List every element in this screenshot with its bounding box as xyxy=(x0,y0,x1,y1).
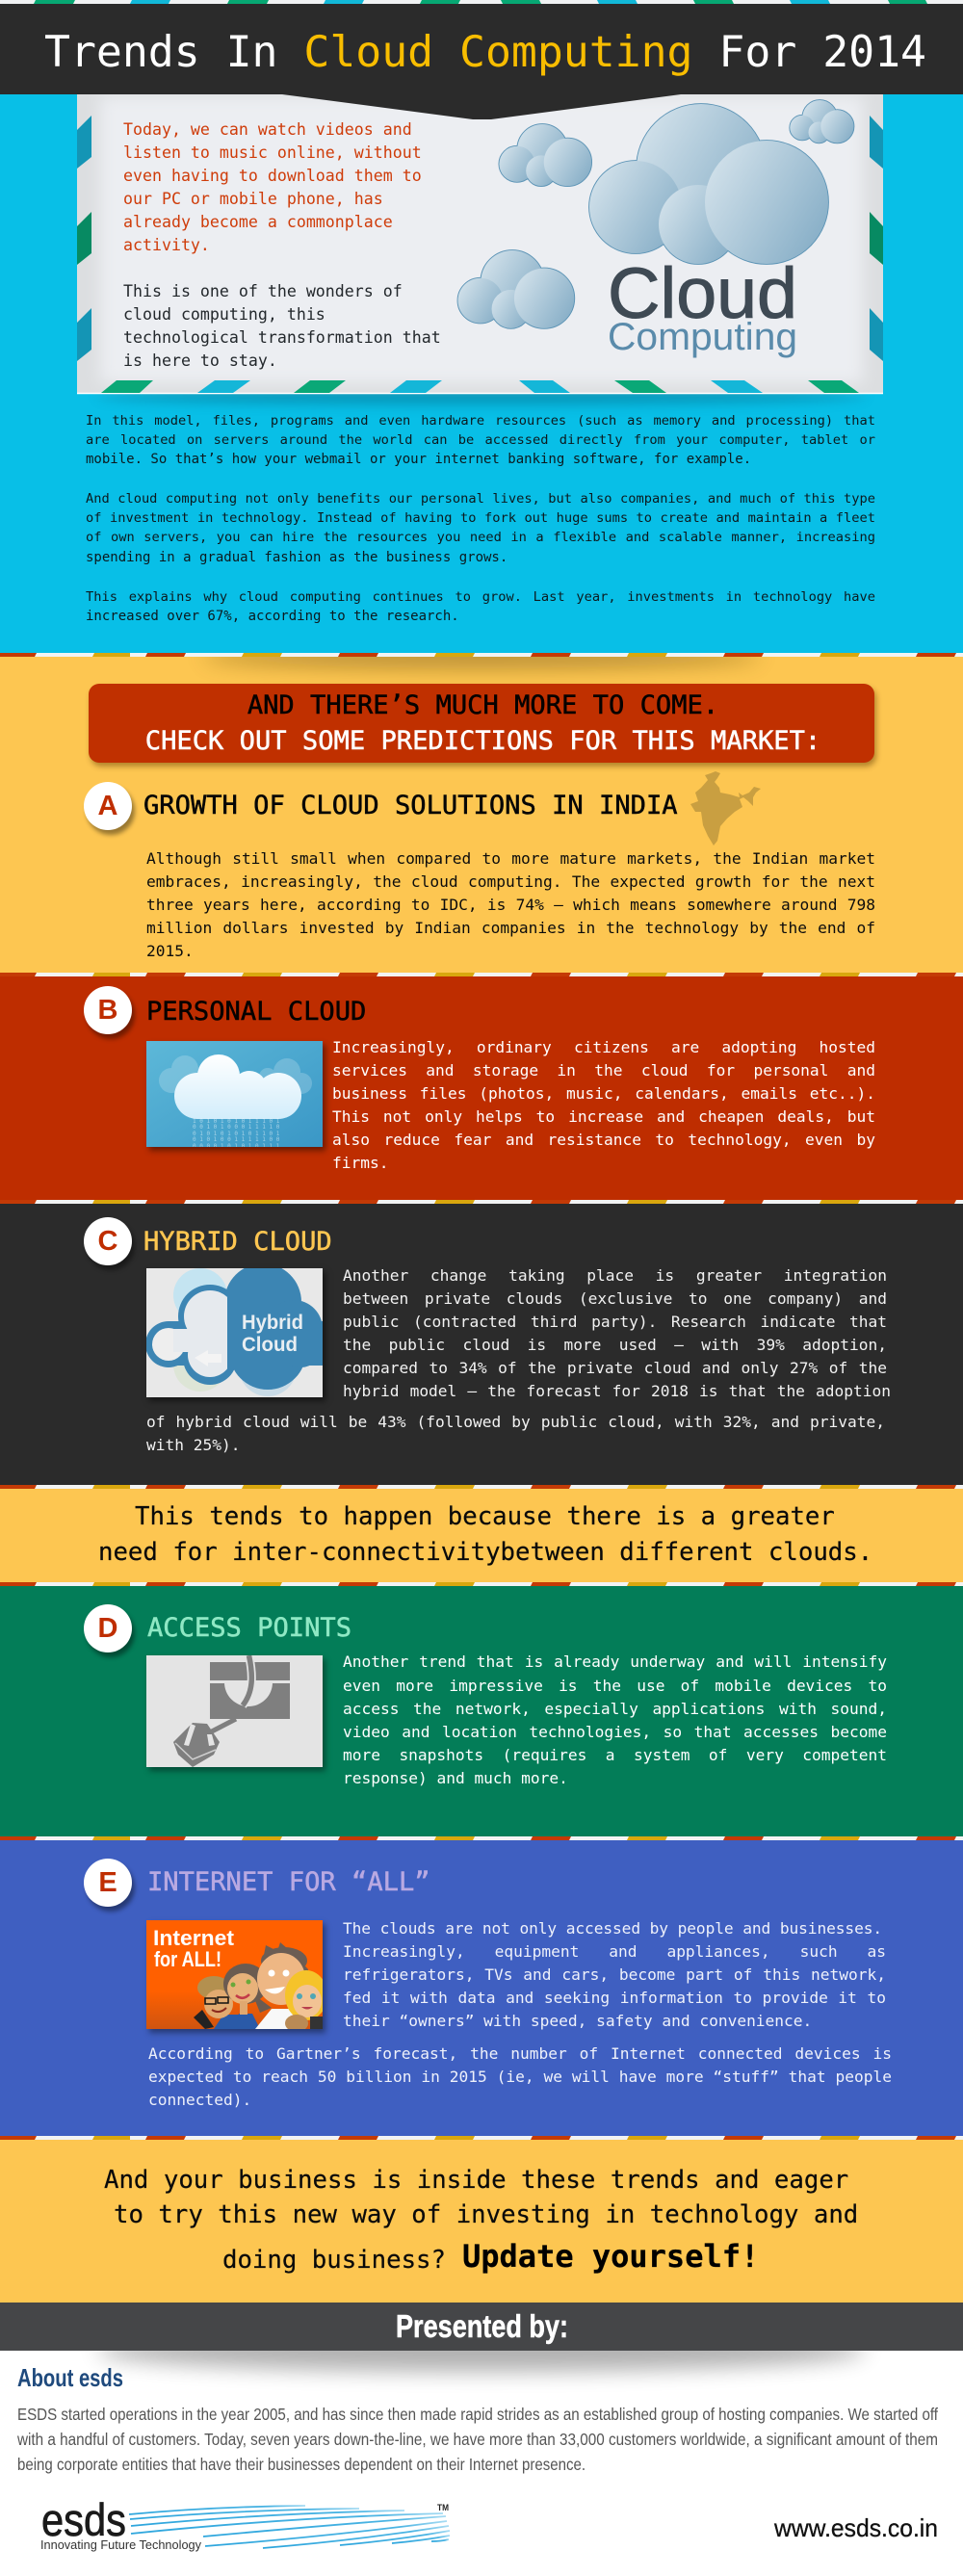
icon: large cloud xyxy=(589,104,828,264)
callout line one: This tends to happen because there is a greater xyxy=(135,1502,835,1531)
text: personal cloud: This not only helps to increase and cheapen deals, but xyxy=(332,1107,875,1126)
about paragraph: being corporate entities that have their businesses dependent on their Internet presence. xyxy=(17,2455,586,2474)
text: Gartner forecast: expected to reach 50 billion in 2015 (ie, we will have more “stuff” that people xyxy=(148,2068,892,2086)
text: India growth: embraces, increasingly, the cloud computing. The expected growth for the next xyxy=(146,872,875,891)
text: personal cloud: also reduce fear and resistance to technology, even by xyxy=(332,1131,875,1149)
website url: www.esds.co.in xyxy=(773,2513,938,2542)
panel: interconnectivity callout xyxy=(0,1489,963,1582)
callout banner xyxy=(89,684,874,763)
icon: letter E badge xyxy=(84,1859,132,1907)
text: India growth: Although still small when compared to more mature markets, the Indian market xyxy=(146,849,875,868)
icon: small cloud lower xyxy=(457,250,574,328)
intro paragraph two: And cloud computing not only benefits our personal lives, but also companies, and much of this type xyxy=(86,491,875,507)
icon: letter B badge xyxy=(84,986,132,1034)
image: personal cloud illustration xyxy=(146,1041,323,1147)
text: access points: Another trend that is already underway and will intensify xyxy=(343,1652,887,1671)
text: access points: response) and much more. xyxy=(343,1769,568,1787)
text: internet for all beside image: fed it with data and seeking information to provide it to xyxy=(343,1989,886,2007)
panel: E internet for all xyxy=(0,1840,963,2136)
image: internet for all cartoon: Internet xyxy=(153,1926,235,1950)
letter text: lead paragraph: already become a commonplace xyxy=(123,213,393,231)
text: personal cloud: business files (photos, music, calendars, emails etc..). xyxy=(332,1084,875,1103)
letter text: lead paragraph: activity. xyxy=(123,236,210,254)
text: internet for all beside image: The clouds are not only accessed by people and businesses. xyxy=(343,1919,882,1938)
text: access points: even more impressive is the use of mobile devices to xyxy=(343,1677,887,1695)
text: hybrid cloud below image: with 25%). xyxy=(146,1436,240,1454)
image: personal cloud illustration: 0 1 0 1 0 1 0 1 0 1 1 0 1 xyxy=(193,1131,280,1137)
closing line one: And your business is inside these trends and eager xyxy=(104,2166,848,2195)
text: Gartner forecast: connected). xyxy=(148,2091,251,2109)
image: internet for all cartoon xyxy=(146,1920,323,2029)
text: internet for all beside image: their “owners” with speed, safety and convenience. xyxy=(343,2012,812,2030)
intro paragraph two xyxy=(86,491,875,565)
image: personal cloud illustration: 0 0 1 0 1 0 0 0 1 1 1 1 0 xyxy=(193,1124,280,1131)
icon: letter D badge xyxy=(84,1604,132,1652)
icon: letter D badge: D xyxy=(98,1613,117,1644)
cloud computing logotype: Cloud xyxy=(608,253,797,333)
esds logo: esds xyxy=(41,2494,126,2545)
text: hybrid cloud beside image: between private clouds (exclusive to one company) and xyxy=(343,1289,887,1308)
text: access points: access the network, especially applications with sound, xyxy=(343,1700,887,1718)
image: plug illustration xyxy=(146,1655,323,1767)
icon: small cloud top right xyxy=(790,100,853,143)
text: internet for all beside image: refrigerators, TVs and cars, become part of this network, xyxy=(343,1965,886,1984)
icon: India map xyxy=(690,771,761,846)
image: personal cloud illustration: 0 1 0 1 0 0 1 1 1 1 1 0 0 xyxy=(193,1136,280,1143)
icon: letter A badge: A xyxy=(98,791,117,821)
panel: presented by bar xyxy=(0,2303,963,2351)
image: hybrid cloud illustration xyxy=(146,1268,323,1397)
icon: letter C badge xyxy=(84,1217,132,1265)
text: India growth: three years here, according to IDC, is 74% – which means somewhere around 798 xyxy=(146,896,875,914)
letter text: lead paragraph: listen to music online, without xyxy=(123,143,422,162)
text: access points: video and location technologies, so that accesses become xyxy=(343,1723,887,1741)
letter text: lead paragraph: even having to download them to xyxy=(123,167,422,185)
text: hybrid cloud beside image: the public cloud is more used – with 39% adoption, xyxy=(343,1336,887,1354)
letter text: second paragraph: cloud computing, this xyxy=(123,305,325,324)
about heading: About esds xyxy=(17,2363,123,2392)
intro paragraph one xyxy=(86,412,875,467)
letter text: second paragraph: technological transformation that xyxy=(123,328,441,347)
image: personal cloud illustration: 1 0 1 0 1 0 1 0 1 1 1 0 1 xyxy=(193,1118,280,1125)
text: personal cloud: services and storage in the cloud for personal and xyxy=(332,1061,875,1080)
closing line two: to try this new way of investing in technology and xyxy=(114,2200,858,2229)
text: Gartner forecast: According to Gartner’s forecast, the number of Internet connected devices is xyxy=(148,2044,892,2063)
text: hybrid cloud beside image: compared to 34% of the private cloud and only 27% of the xyxy=(343,1359,887,1377)
panel: about esds footer xyxy=(16,2351,938,2552)
letter text: lead paragraph: our PC or mobile phone, has xyxy=(123,190,383,208)
text: hybrid cloud beside image: public (contracted third party). Research indicate that xyxy=(343,1313,887,1331)
callout line two: need for inter-connectivitybetween different clouds. xyxy=(98,1538,872,1567)
panel: B personal cloud xyxy=(0,976,963,1200)
callout banner: CHECK OUT SOME PREDICTIONS FOR THIS MARKET: xyxy=(145,726,820,756)
heading D: ACCESS POINTS xyxy=(147,1613,351,1643)
text: India growth: million dollars invested by Indian companies in the technology by the end of xyxy=(146,919,875,937)
intro paragraph three: This explains why cloud computing continues to grow. Last year, investments in technology have xyxy=(86,589,875,605)
title banner xyxy=(0,0,963,119)
letter text: lead paragraph: Today, we can watch videos and xyxy=(123,120,412,139)
heading B: PERSONAL CLOUD xyxy=(146,997,366,1027)
image: internet for all cartoon: for ALL! xyxy=(154,1947,221,1971)
esds logo: TM xyxy=(437,2503,449,2512)
panel: C hybrid cloud xyxy=(0,1204,963,1485)
panel: presented by bar: Presented by: xyxy=(396,2308,568,2344)
text: personal cloud: firms. xyxy=(332,1154,388,1172)
cloud computing logotype: Computing xyxy=(608,316,797,358)
title banner: Trends In Cloud Computing For 2014 xyxy=(44,26,926,77)
update yourself emphasis: Update yourself! xyxy=(462,2238,759,2275)
esds logo xyxy=(40,2494,450,2552)
intro paragraph three xyxy=(86,589,875,624)
heading C: HYBRID CLOUD xyxy=(143,1227,332,1257)
icon: letter E badge: E xyxy=(98,1867,117,1898)
text: personal cloud xyxy=(332,1038,875,1172)
image: hybrid cloud illustration: Hybrid xyxy=(242,1312,303,1334)
text: India growth xyxy=(146,849,875,960)
letter text: second paragraph: This is one of the wonders of xyxy=(123,282,403,300)
panel: introduction xyxy=(0,94,963,653)
panel: D access points xyxy=(0,1586,963,1836)
intro paragraph three: increased over 67%, according to the research. xyxy=(86,609,459,624)
text: hybrid cloud below image xyxy=(146,1413,885,1454)
heading A: GROWTH OF CLOUD SOLUTIONS IN INDIA xyxy=(143,791,678,820)
intro paragraph one: are located on servers around the world can be accessed directly from your computer, tablet or xyxy=(86,432,875,448)
text: India growth: 2015. xyxy=(146,942,194,960)
panel: closing call to action xyxy=(0,2140,963,2303)
envelope letter with clouds xyxy=(77,94,883,410)
letter text: lead paragraph xyxy=(123,120,422,254)
text: access points xyxy=(343,1652,887,1787)
intro paragraph two: of investment in technology. Instead of having to fork out huge sums to create and maintain a fleet xyxy=(86,510,875,526)
icon: letter B badge: B xyxy=(98,995,117,1026)
image: hybrid cloud illustration: Cloud xyxy=(242,1334,298,1356)
text: hybrid cloud beside image: Another change taking place is greater integration xyxy=(343,1266,887,1285)
icon: letter C badge: C xyxy=(98,1226,117,1257)
intro paragraph two: spending in a gradual fashion as the business grows. xyxy=(86,550,508,565)
text: hybrid cloud beside image: hybrid model – the forecast for 2018 is that the adoption xyxy=(343,1382,891,1400)
closing line three: doing business? xyxy=(222,2246,446,2275)
about paragraph xyxy=(16,2405,938,2474)
letter text: second paragraph: is here to stay. xyxy=(123,351,277,370)
icon: letter A badge xyxy=(84,782,132,830)
letter text: second paragraph xyxy=(123,282,441,370)
text: personal cloud: Increasingly, ordinary citizens are adopting hosted xyxy=(332,1038,875,1056)
text: internet for all beside image: Increasingly, equipment and appliances, such as xyxy=(343,1942,886,1961)
intro paragraph one: In this model, files, programs and even hardware resources (such as memory and processing) that xyxy=(86,412,875,428)
icon: small cloud middle xyxy=(499,124,591,186)
esds logo: Innovating Future Technology xyxy=(40,2537,201,2552)
heading E: INTERNET FOR “ALL” xyxy=(147,1867,430,1897)
panel: A growth of cloud solutions in India xyxy=(0,657,963,973)
callout banner: AND THERE’S MUCH MORE TO COME. xyxy=(247,690,718,720)
text: access points: more snapshots (requires a system of very competent xyxy=(343,1746,887,1764)
text: hybrid cloud below image: of hybrid cloud will be 43% (followed by public cloud, with 32%, and private, xyxy=(146,1413,885,1431)
text: internet for all beside image xyxy=(343,1919,886,2030)
text: hybrid cloud beside image xyxy=(343,1266,891,1400)
text: Gartner forecast xyxy=(148,2044,892,2109)
intro paragraph two: of own servers, you can hire the resources you need in a flexible and scalable manner, increasing xyxy=(86,530,875,545)
intro paragraph one: mobile. So that’s how your webmail or your internet banking software, for example. xyxy=(86,452,751,467)
